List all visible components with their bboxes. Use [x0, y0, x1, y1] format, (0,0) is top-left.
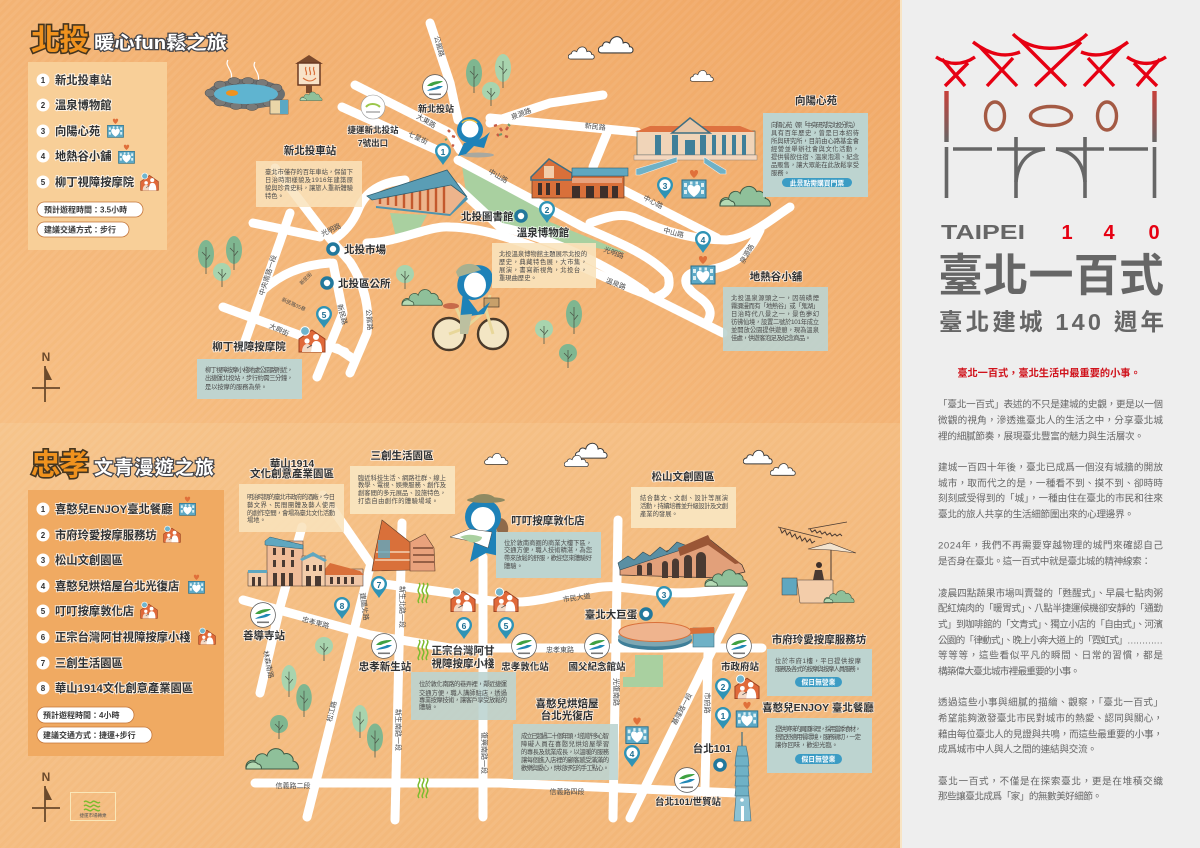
info box: 正宗台灣阿甘: 專業按摩技術，讓客戶享受放鬆的	[419, 695, 507, 704]
body text: 等等等，這些看似平凡的瞬間、日常的習慣，都是	[938, 650, 1163, 662]
info box: 華山1914	[239, 484, 344, 532]
info box: 松山文創園區: 產業的發展。	[640, 509, 678, 518]
road labels: 忠孝: 市民大道	[562, 591, 591, 604]
logo wordmark: 4	[1103, 222, 1115, 244]
info box: 新北投車站: 貌與珍貴史料，讓旅人重新體驗	[265, 183, 354, 192]
road labels: 忠孝: 忠孝東路	[546, 645, 574, 654]
info box: 三創生活園區: 教學、電視、娛樂服務、創作及	[358, 480, 447, 489]
info box: 向陽心苑	[763, 113, 868, 197]
body text: 公園的「律動式」、晚上小奔大道上的「霓虹式」…………	[938, 634, 1163, 646]
logo wordmark	[938, 222, 1164, 335]
info box: 市府玲愛按摩服務坊: 服務及各式的按摩與按摩人員服務。	[775, 664, 861, 673]
info box: 松山文創園區: 結合藝文、文創、設計等展演	[640, 493, 728, 502]
info box: 三創生活園區	[350, 466, 455, 514]
info box: 三創生活園區: 創客間的多元展品、設施特色，	[358, 488, 446, 497]
body text: 那些讓臺北成爲「家」的無數美好細節。	[938, 790, 1102, 802]
itinerary list: 忠孝: 8	[41, 684, 46, 693]
info box: 松山文創園區: 活動，持續培養並升級設計及文創	[640, 501, 728, 510]
place labels: 忠孝: 正宗台灣阿甘	[432, 644, 495, 657]
road labels: 北投: 溫泉路	[605, 276, 627, 292]
body text: 2024年，我們不再需要穿越物理的城門來確認自己	[938, 540, 1163, 552]
itinerary list: 北投: 向陽心苑	[55, 124, 101, 138]
road labels: 北投: 新民路	[584, 121, 606, 132]
metro stations: 台北101/世貿站	[655, 796, 721, 808]
place labels: 北投: 地熱谷小舖	[750, 270, 803, 283]
place labels: 忠孝: 華山1914	[270, 457, 314, 470]
metro stations: 忠孝敦化站	[501, 661, 549, 673]
info box: 華山1914: 藝文界、民間團體及藝人使用	[247, 500, 335, 509]
map icons and pins: 忠孝: 3	[662, 590, 667, 600]
place labels: 忠孝: 喜憨兒ENJOY 臺北餐廳	[762, 701, 874, 714]
mascot: cyclist	[433, 264, 508, 350]
itinerary list: 北投: 1	[41, 76, 46, 85]
road labels: 忠孝: 松江路	[325, 700, 338, 723]
road labels: 忠孝: 林森南路	[261, 650, 276, 679]
info box: 喜憨兒烘焙屋: 的專長及就業成長，以溫暖的服務	[521, 747, 610, 756]
info box: 喜憨兒烘焙屋: 障礙人員在喜憨兒烘焙屋學習	[521, 739, 609, 748]
body text: 微觀的視角，滲透進臺北人的生活之中，分享臺北城	[938, 414, 1163, 426]
place labels: 忠孝: 喜憨兒烘焙屋	[536, 697, 598, 710]
info box: 溫泉博物館: 展演，書寫新視角，北投台，	[499, 265, 587, 274]
road network: 北投	[223, 23, 790, 377]
info box: 溫泉博物館: 歷史，典藏特色展，大市集，	[499, 257, 587, 266]
itinerary list: 忠孝: 正宗台灣阿甘視障按摩小棧	[55, 630, 191, 644]
info box: 地熱谷小舖: 並開放公園提供遊憩，現為溫泉	[731, 325, 820, 334]
title: 忠孝: 忠孝	[31, 449, 89, 482]
info box: 華山1914: 場地。	[247, 515, 266, 524]
info box: 華山1914: 的創作空間，會場為臺北文化活動	[247, 508, 335, 517]
metro icon: 新北投站	[418, 75, 454, 114]
itinerary list: 忠孝: 叮叮按摩敦化店	[55, 604, 134, 618]
itinerary list: 北投: 柳丁視障按摩院	[55, 175, 135, 189]
map icons and pins: 忠孝: 1	[721, 711, 726, 721]
road labels: 忠孝: 光復南路	[612, 678, 621, 706]
map icons and pins: 北投: 1	[441, 147, 446, 157]
itinerary list: 北投: 溫泉博物館	[55, 98, 112, 112]
road labels: 北投: 泉源路	[738, 242, 756, 265]
info box: 新北投車站: 臺北市僅存的百年車站，保留下	[265, 167, 353, 176]
metro stations: 市政府站	[721, 661, 759, 673]
body text: 是否身在臺北。這一百式中就是臺北城的精神線索：	[938, 556, 1151, 568]
clouds: 北投	[568, 37, 713, 81]
road labels: 北投: 新民路35巷	[281, 296, 307, 313]
itinerary list: 北投: 建議交通方式：步行	[44, 224, 116, 234]
info box: 喜憨兒烘焙屋: 成立已超過二十個年頭，培訓許多心智	[521, 731, 609, 740]
place labels: 忠孝: 松山文創園區	[652, 470, 715, 483]
info box: 正宗台灣阿甘: 體驗。	[419, 702, 438, 711]
building: 華山1914	[248, 537, 364, 586]
place labels: 北投: 溫泉博物館	[517, 226, 570, 239]
illustration: hot spring sign	[295, 55, 323, 101]
info box: 喜憨兒ENJOY 臺北餐廳: 讓你回味，歡迎光臨。	[775, 740, 838, 749]
info box: 向陽心苑: 服務。	[771, 168, 790, 177]
road labels: 忠孝	[261, 586, 712, 796]
place labels: 忠孝: 叮叮按摩敦化店	[511, 514, 585, 527]
road labels: 北投: 光明路	[602, 245, 625, 260]
info box: 柳丁視障按摩院: 是以按摩的服務為榮。	[205, 382, 267, 391]
itinerary list: 北投: 預計遊程時間：3.5小時	[44, 204, 127, 214]
info box: 向陽心苑: 經營並舉辦社會與文化活動，	[771, 144, 859, 153]
road labels: 忠孝: 新生北路一段	[398, 586, 407, 628]
road labels: 忠孝: 基隆路一段	[670, 691, 694, 726]
info box: 向陽心苑: 提供餐飲住宿、溫泉泡湯、紀念	[771, 152, 860, 161]
info box: 地熱谷小舖: 霧瀰漫而有「地熱谷」或「鬼湖」	[731, 301, 819, 310]
itinerary list: 忠孝: 三創生活園區	[55, 656, 123, 670]
map icons and pins: 北投: 5	[322, 310, 327, 320]
place labels: 北投: 捷運新北投站	[347, 125, 399, 135]
road labels: 北投: 新民路	[335, 303, 349, 326]
info box: 叮叮按摩敦化店	[496, 532, 601, 578]
road labels: 北投: 新民街	[298, 271, 314, 287]
logo wordmark: 0	[1148, 222, 1160, 244]
road labels: 忠孝: 信義路二段	[276, 781, 310, 790]
info box: 松山文創園區	[631, 487, 736, 528]
info box: 地熱谷小舖: 北投溫泉源頭之一，因硫磺煙	[731, 293, 820, 302]
place labels: 北投: 北投圖書館	[461, 210, 514, 223]
compass: 忠孝: N	[42, 770, 50, 784]
info box: 地熱谷小舖	[723, 287, 828, 351]
itinerary list: 忠孝: 7	[41, 659, 46, 668]
place labels: 忠孝: 視障按摩小棧	[432, 657, 495, 670]
info box: 新北投車站: 日治時期樣貌及1916年建築原	[265, 175, 353, 184]
body text: 刻刻感受得到的「城」，一種由住在臺北的市民和往來	[938, 492, 1163, 504]
itinerary list: 忠孝: 建議交通方式：捷運+步行	[43, 730, 136, 740]
legend: 捷運市場轉乘: 捷運市場轉乘	[80, 812, 107, 819]
map icons and pins: 忠孝: 6	[462, 621, 467, 631]
logo wordmark: 臺北建城 140 週年	[939, 308, 1164, 335]
building: 臺北大巨蛋	[618, 622, 714, 650]
place labels: 北投: 柳丁視障按摩院	[212, 340, 286, 353]
info box: 喜憨兒ENJOY 臺北餐廳: 提供美味的異國料理，採用當季食材，	[775, 724, 861, 733]
info box: 喜憨兒ENJOY 臺北餐廳	[767, 718, 872, 773]
mascot: map reader	[450, 494, 510, 562]
logo wordmark: 1	[1061, 222, 1073, 244]
logo wordmark: TAIPEI	[941, 222, 1025, 244]
pill: 此景點需購買門票: 此景點需購買門票	[790, 178, 844, 188]
title: 北投: 北投	[31, 24, 89, 57]
compass: 忠孝	[32, 770, 60, 822]
itinerary list: 北投	[28, 62, 167, 250]
road labels: 北投: 中心路	[642, 193, 665, 211]
body text: 凌晨四點蔬果市場叫賣聲的「甦醒式」、早晨七點肉粥	[938, 588, 1163, 600]
illustration: hot spring pond	[205, 60, 288, 114]
body text: 成爲城市中人與人之間的連結與交流。	[938, 744, 1097, 756]
info box: 柳丁視障按摩院	[197, 359, 302, 399]
compass: 北投	[32, 350, 60, 402]
body text: 藉由每位臺北人的見證與共鳴，而這些最重要的小事，	[938, 728, 1163, 740]
road labels: 北投: 大興街	[268, 321, 290, 338]
body text: 構築偉大臺北城市裡最重要的小事。	[938, 666, 1080, 678]
itinerary list: 北投: 2	[41, 101, 46, 110]
metro stations: 國父紀念館站	[568, 661, 626, 673]
small logo: 新北投 exit	[361, 95, 385, 119]
road labels: 北投: 中央南路一段	[257, 254, 278, 297]
road labels: 忠孝: 信義路四段	[550, 787, 584, 796]
info box: 新北投車站: 特色。	[265, 191, 284, 200]
info box: 市府玲愛按摩服務坊: 位於市府1樓，平日提供按摩	[775, 656, 861, 665]
info box: 正宗台灣阿甘	[411, 672, 516, 720]
body text: 建城一百四十年後，臺北已成爲一個沒有城牆的開放	[938, 462, 1163, 474]
place labels: 北投: 北投市場	[344, 243, 386, 256]
info box: 叮叮按摩敦化店: 交通方便，職人技術精湛，為您	[504, 545, 592, 554]
info box: 新北投車站	[256, 161, 362, 207]
place labels: 忠孝: 台北光復店	[541, 709, 594, 722]
map icons and pins: 北投: 3	[663, 181, 668, 191]
logo wordmark: 臺北一百式	[938, 250, 1164, 301]
info box: 三創生活園區: 臨近科技生活、網路社群、線上	[358, 473, 446, 482]
metro stations: 忠孝新生站	[359, 660, 412, 673]
panel: 臺北一百式 sidebar	[936, 34, 1166, 802]
itinerary list: 忠孝: 3	[41, 556, 46, 565]
info box: 喜憨兒ENJOY 臺北餐廳: 搭配舒適用餐環境，服務親切，一定	[775, 732, 862, 741]
info box: 喜憨兒烘焙屋: 讓每個進入店裡的顧客感受滿滿的	[521, 755, 609, 764]
itinerary list: 忠孝: 預計遊程時間：4小時	[43, 710, 119, 720]
map icons and pins: 忠孝: 2	[721, 682, 726, 692]
park: 忠孝	[623, 655, 663, 687]
road labels: 忠孝: 建國北路	[358, 592, 371, 621]
trees: 北投	[198, 54, 770, 368]
body text: 「臺北一百式」表述的不只是建城的史觀，更是以一個	[938, 398, 1163, 410]
info box: 喜憨兒烘焙屋: 歡樂與愛心，烘焙好吃的手工點心。	[521, 763, 609, 772]
pill: 假日無營業 2: 假日無營業	[802, 754, 836, 764]
building: 新北投車站	[367, 170, 468, 216]
itinerary list: 忠孝: 華山1914文化創意產業園區	[55, 681, 193, 695]
place labels: 北投: 向陽心苑	[795, 94, 837, 107]
itinerary list: 忠孝: 松山文創園區	[55, 553, 123, 567]
itinerary list: 北投: 3	[41, 127, 46, 136]
building: 松山文創園區	[618, 535, 747, 586]
metro stations	[243, 603, 759, 808]
itinerary list: 忠孝: 2	[41, 531, 46, 540]
road labels: 北投: 七星街	[407, 129, 429, 146]
road labels: 忠孝: 市府路	[703, 692, 712, 714]
place labels: 忠孝: 台北101	[693, 742, 731, 755]
info box: 華山1914: 明治時期的臺北市政府的酒廠，今日	[247, 492, 335, 501]
road labels: 北投	[257, 35, 756, 338]
info box: 向陽心苑: 品販售，讓大眾能在此放鬆享受	[771, 160, 859, 169]
title: 北投	[31, 24, 227, 57]
place labels: 忠孝: 文化創意產業園區	[250, 467, 334, 480]
info box: 溫泉博物館: 重現曲歷史。	[499, 273, 537, 282]
info box: 三創生活園區: 打造自由創作的體驗場域。	[358, 496, 438, 505]
info box: 溫泉博物館	[492, 243, 596, 288]
road labels: 北投: 中山路	[662, 226, 685, 240]
body text: 希望能夠激發臺北市民對城市的熱愛、認同與關心，	[938, 712, 1163, 724]
river crossing icons	[418, 583, 428, 798]
building: 台北101	[734, 732, 751, 821]
info box: 向陽心苑: 向陽心苑（原「中央研究院北投分院」）	[771, 120, 859, 129]
info box: 向陽心苑: 具有百年歷史，曾是日本招待	[771, 128, 860, 137]
road labels: 北投: 光明路	[320, 221, 342, 238]
place labels: 忠孝: 市府玲愛按摩服務坊	[772, 633, 867, 646]
place labels: 北投: 新北投車站	[284, 144, 337, 157]
title: 忠孝: 文青漫遊之旅	[94, 456, 214, 479]
place labels: 北投: 7號出口	[358, 138, 388, 148]
body text: 裡的細膩節奏，展現臺北豐富的魅力與生活層次。	[938, 430, 1144, 442]
subtitle: 臺北一百式，臺北生活中最重要的小事。	[957, 366, 1141, 380]
map icons and pins: 北投: 4	[701, 235, 706, 245]
itinerary list: 忠孝	[28, 490, 224, 756]
info box: 地熱谷小舖: 佳處，供遊客泡足及紀念商品。	[731, 333, 811, 342]
map icons and pins: 忠孝: 7	[377, 580, 382, 590]
map icons and pins: 忠孝: 8	[340, 601, 345, 611]
map icons and pins: 忠孝	[334, 576, 759, 767]
body text: 城市，取而代之的是，一種看不到、摸不到、卻時時	[938, 478, 1163, 490]
road labels: 忠孝: 新生南路一段	[394, 709, 403, 751]
map icons and pins: 北投: 2	[545, 205, 550, 215]
itinerary list: 忠孝: 喜憨兒ENJOY臺北餐廳	[55, 502, 172, 516]
clouds: 忠孝	[485, 443, 795, 475]
place labels: 忠孝: 三創生活園區	[370, 449, 434, 462]
building: 向陽心苑	[634, 118, 757, 175]
road labels: 北投: 公館路	[364, 309, 375, 331]
road labels: 北投: 泉源路	[510, 106, 533, 121]
info box: 正宗台灣阿甘: 交通方便，職人講師駐店，透過	[419, 688, 508, 697]
itinerary list: 忠孝: 市府玲愛按摩服務坊	[55, 528, 157, 542]
info box: 柳丁視障按摩院: 出捷運北投站，步行約需三分鐘，	[205, 373, 293, 382]
itinerary list: 忠孝: 4	[41, 582, 46, 591]
info box: 市府玲愛按摩服務坊	[767, 649, 872, 696]
road labels: 北投: 公館路	[432, 35, 446, 58]
info box: 向陽心苑: 所與研究所，目前由心路基金會	[771, 136, 860, 145]
panel: 北投 route map	[28, 23, 868, 402]
road network: 忠孝	[243, 495, 762, 820]
map icons and pins: 北投	[299, 143, 715, 352]
itinerary list: 北投: 5	[41, 178, 46, 187]
illustration: outdoor cafe	[778, 522, 856, 603]
logo: Taipei 140 gate	[936, 34, 1166, 198]
title: 忠孝	[31, 449, 214, 482]
body text	[938, 398, 1163, 802]
road labels: 忠孝: 忠孝東路	[301, 615, 330, 631]
body text: 透過這些小事與細膩的描繪、觀察，「臺北一百式」	[938, 696, 1163, 708]
itinerary list: 北投: 4	[41, 152, 46, 161]
road labels: 北投: 中山路	[487, 167, 510, 185]
body text: 臺北的旅人共享的生活細節圍出來的心理邊界。	[938, 508, 1134, 520]
body text: 配紅燒肉的「暖胃式」、八點半捷運候機卻安靜的「通勤	[938, 602, 1163, 614]
info box: 叮叮按摩敦化店: 體驗。	[504, 561, 523, 570]
info box: 地熱谷小舖: 日治時代八景之一，景色夢幻	[731, 309, 819, 318]
trees: 忠孝	[246, 637, 383, 769]
itinerary list: 忠孝: 喜憨兒烘焙屋台北光復店	[55, 579, 179, 593]
mascot: running	[445, 117, 510, 158]
legend: 捷運市場轉乘	[70, 792, 116, 820]
place labels: 忠孝: 臺北大巨蛋	[585, 608, 638, 621]
info box: 叮叮按摩敦化店: 帶來放鬆的舒服，歡迎您來體驗好	[504, 553, 593, 562]
itinerary list: 忠孝: 1	[41, 505, 46, 514]
road labels: 北投: 大東路	[415, 112, 438, 130]
place labels: 忠孝	[250, 449, 874, 770]
road labels: 忠孝: 復興南路一段	[480, 732, 489, 774]
info box: 柳丁視障按摩院: 柳丁視障按摩小棧地處公園路附近，	[205, 365, 293, 374]
itinerary list: 忠孝: 5	[41, 607, 46, 616]
body text: 式」到咖啡館的「文青式」、獨立小店的「自由式」、河濱	[938, 618, 1163, 630]
itinerary list: 忠孝: 6	[41, 633, 46, 642]
info box: 正宗台灣阿甘: 位於敦化南路的巷弄裡，鄰近捷運	[419, 679, 508, 688]
panel: 忠孝 route map	[28, 443, 874, 822]
itinerary list: 北投: 新北投車站	[55, 73, 112, 87]
body text: 臺北一百式，不僅是在探索臺北，更是在堆積交織	[938, 776, 1163, 788]
building: 溫泉博物館	[531, 159, 628, 198]
compass: 北投: N	[42, 350, 50, 364]
title: 北投: 暖心fun鬆之旅	[94, 32, 227, 53]
info box: 喜憨兒烘焙屋	[513, 724, 618, 780]
place labels: 北投	[212, 94, 837, 353]
itinerary list: 北投: 地熱谷小舖	[55, 149, 112, 163]
building: 三創生活園區	[372, 520, 435, 571]
info box: 溫泉博物館: 北投溫泉博物館主題展示北投的	[499, 249, 587, 258]
info box: 地熱谷小舖: 彷彿仙境，設置二號於101年成立	[731, 317, 819, 326]
info box: 叮叮按摩敦化店: 位於敦南商圈的商業大樓下區，	[504, 538, 592, 547]
metro icon: 新北投站: 新北投站	[418, 103, 454, 114]
map icons and pins: 忠孝: 4	[630, 749, 635, 759]
place labels: 北投: 北投區公所	[338, 277, 391, 290]
metro stations: 善導寺站	[243, 629, 285, 642]
map icons and pins: 忠孝: 5	[504, 621, 509, 631]
pill: 假日無營業: 假日無營業	[802, 678, 836, 686]
